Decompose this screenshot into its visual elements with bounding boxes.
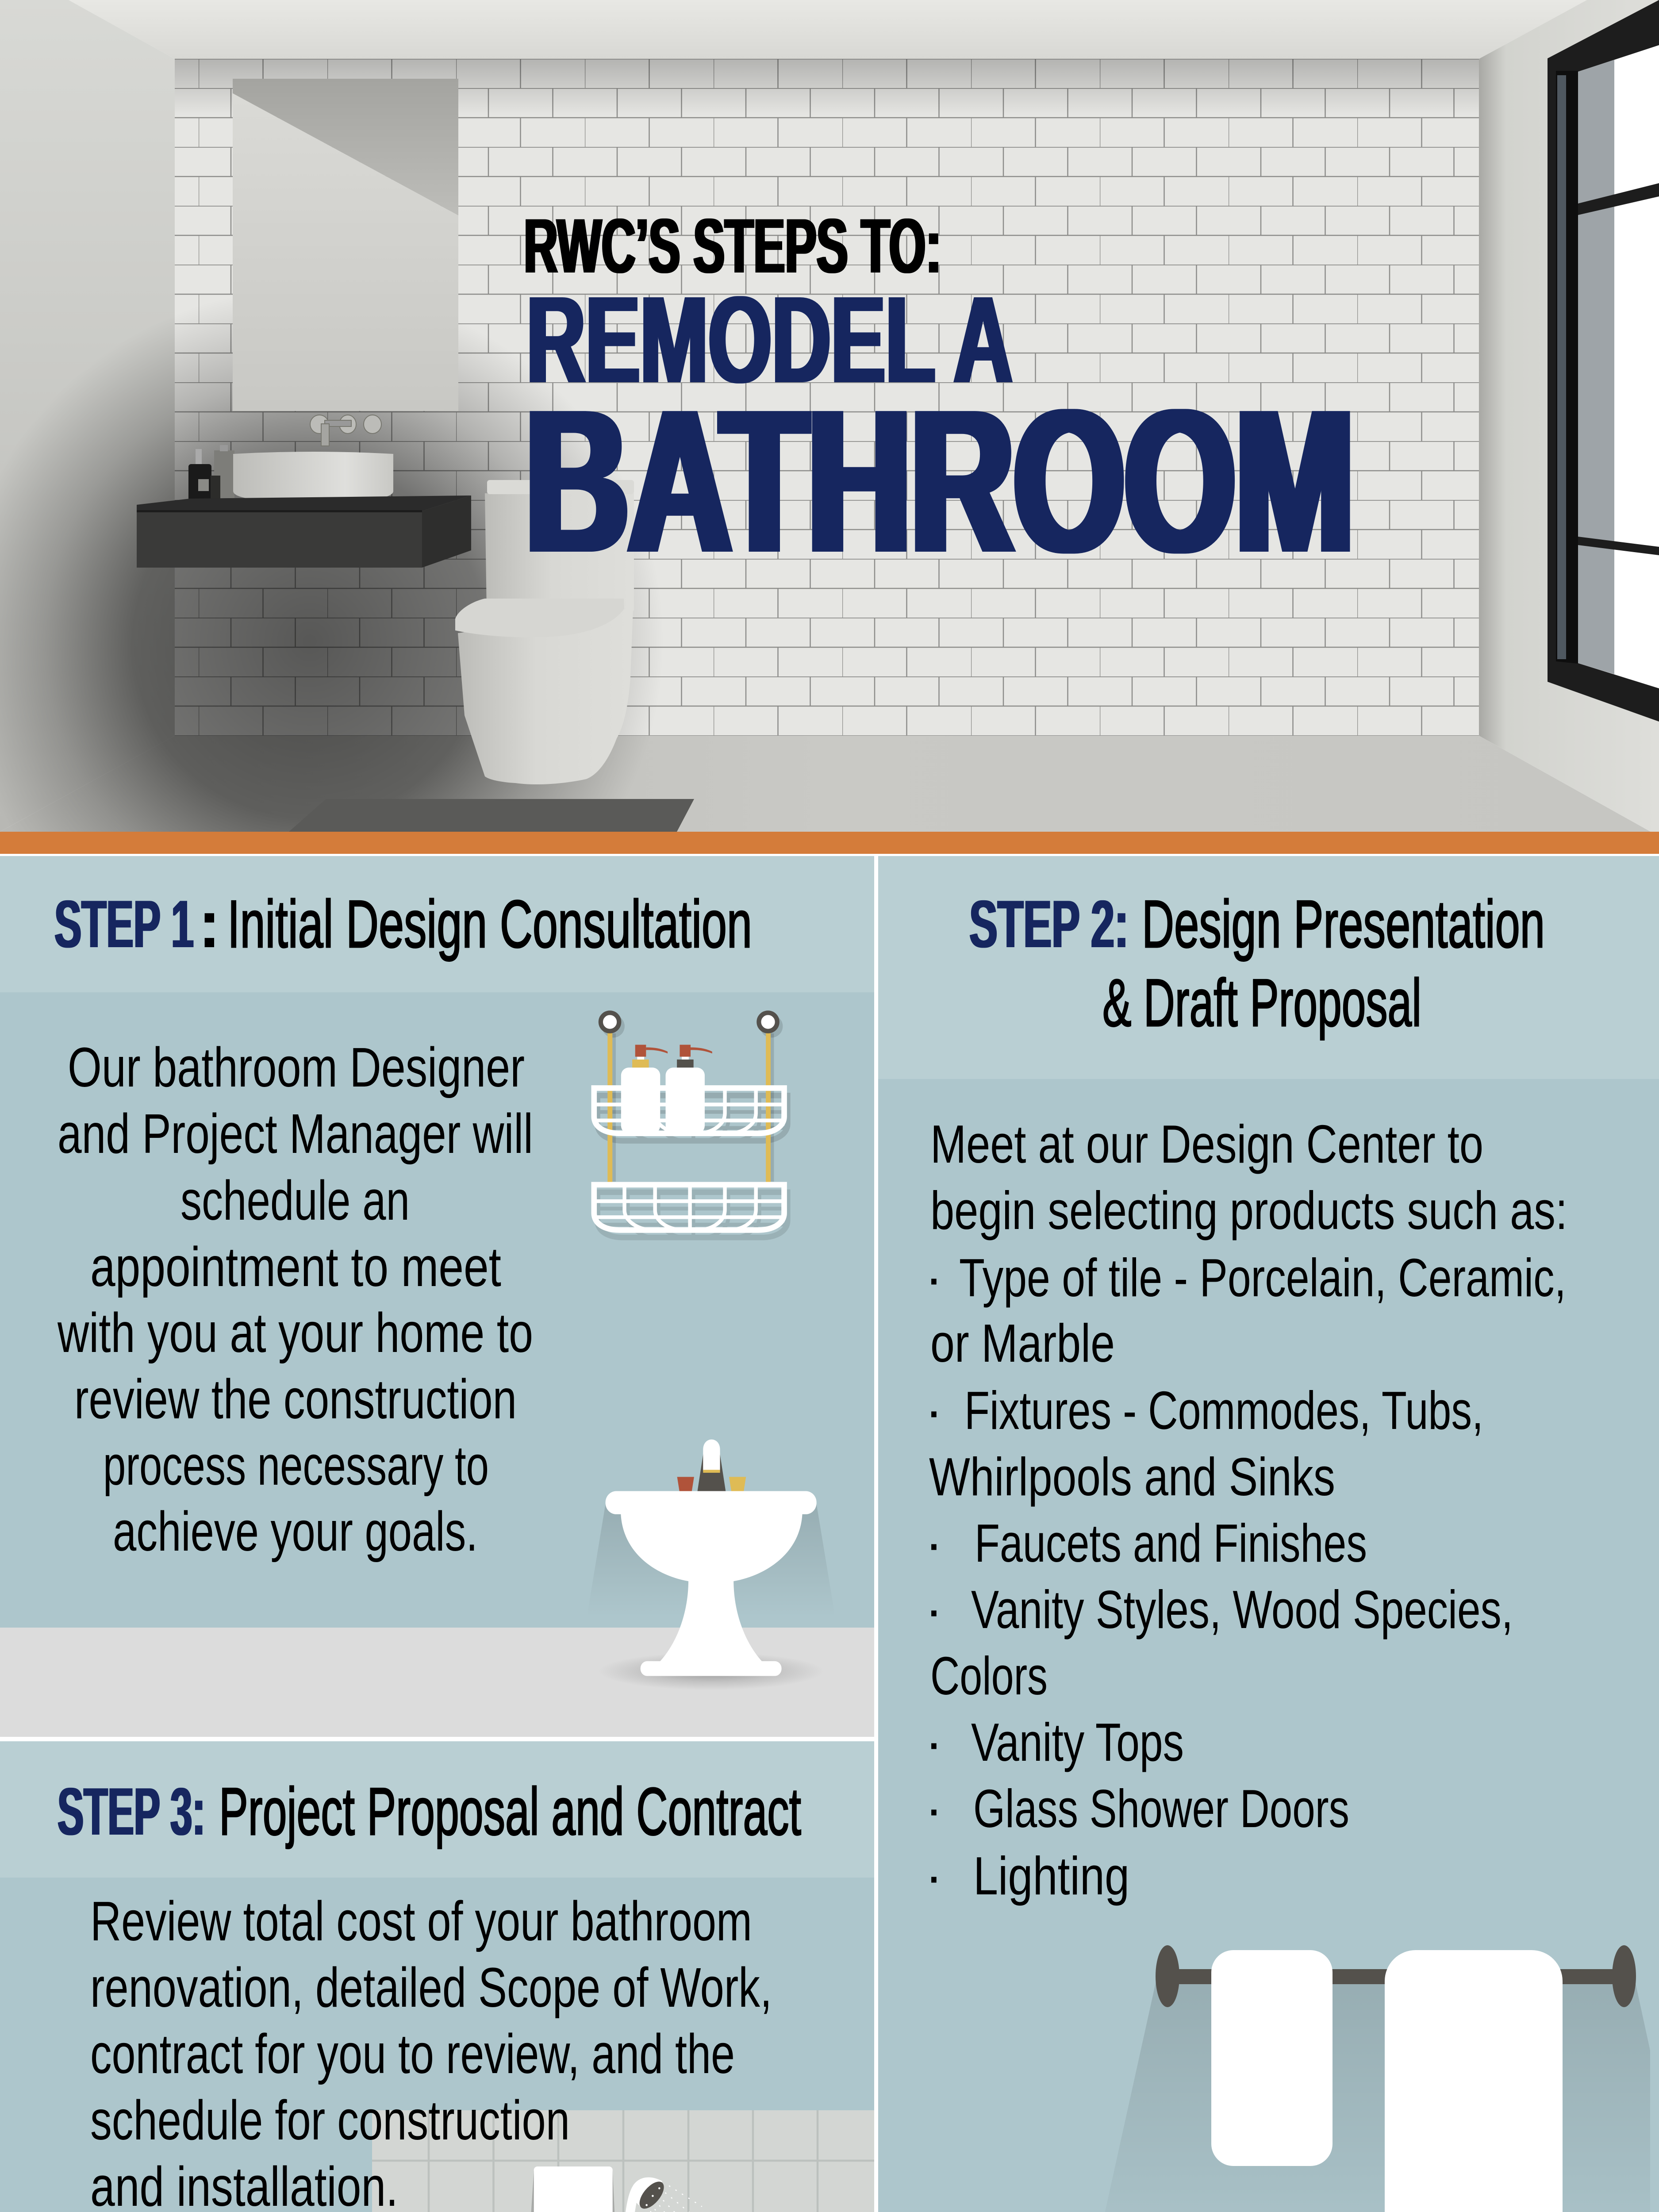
step 2 body text: · xyxy=(925,1380,943,1440)
left wall xyxy=(0,0,175,832)
step 1 heading: STEP 1 xyxy=(54,887,194,962)
step 2 heading xyxy=(969,887,1545,1041)
step 1 body text: with you at your home to xyxy=(57,1302,533,1364)
window xyxy=(1548,0,1659,722)
step 2 body text: · xyxy=(925,1778,943,1839)
step 1 body text: and Project Manager will xyxy=(58,1102,533,1165)
title xyxy=(524,203,1354,595)
step 2 header band xyxy=(878,856,1659,1079)
step 2 body text: Lighting xyxy=(973,1846,1129,1906)
step 1 body text: process necessary to xyxy=(103,1434,489,1497)
step 3 body text: Review total cost of your bathroom xyxy=(90,1890,752,1952)
step 1 body text: Our bathroom Designer xyxy=(68,1036,525,1098)
toilet xyxy=(455,480,634,784)
step 2 body text: · xyxy=(925,1248,943,1308)
mirror xyxy=(233,79,458,411)
step 3 header band xyxy=(0,1741,874,1878)
step 2 body text: · xyxy=(925,1513,943,1573)
step 2 body text: · xyxy=(925,1579,943,1640)
step 3 heading: Project Proposal and Contract xyxy=(219,1774,801,1849)
rug xyxy=(289,799,694,832)
step 3 body text xyxy=(90,1890,772,2212)
step 2 body text: or Marble xyxy=(930,1313,1115,1373)
step 2 body text: Colors xyxy=(930,1646,1048,1706)
step 3 body text: schedule for construction xyxy=(90,2089,570,2151)
icon: towel rack xyxy=(1090,1945,1650,2212)
room shadow xyxy=(0,59,708,832)
step 1 floor xyxy=(0,1628,874,1737)
icon: water heater and hand shower xyxy=(518,2166,707,2212)
panel: step 3 xyxy=(0,1741,874,2212)
vanity cabinet xyxy=(137,495,471,568)
icon: wire shelf with pump bottles xyxy=(594,1013,787,1237)
title line 1: RWC’S STEPS TO: xyxy=(524,203,941,289)
step 2 heading: & Draft Proposal xyxy=(1102,965,1421,1041)
step 2 body text: Fixtures - Commodes, Tubs, xyxy=(964,1380,1483,1440)
step 2 body text: · xyxy=(925,1712,943,1772)
top orange band xyxy=(0,832,1659,854)
ceiling xyxy=(69,0,1587,59)
step 2 body text: Whirlpools and Sinks xyxy=(929,1447,1335,1507)
panel: step 1 xyxy=(0,856,874,1737)
step 2 heading: STEP 2: xyxy=(969,887,1129,962)
basin xyxy=(233,452,393,502)
wall faucet xyxy=(310,415,381,446)
step 2 body text: Vanity Styles, Wood Species, xyxy=(971,1579,1513,1640)
hero bathroom scene xyxy=(0,0,1659,832)
step 2 body text: Faucets and Finishes xyxy=(975,1513,1367,1573)
step 1 body text: review the construction xyxy=(74,1368,517,1430)
step 1 body text: appointment to meet xyxy=(90,1236,501,1298)
step 1 body text: schedule an xyxy=(180,1169,410,1232)
step 2 body text: Vanity Tops xyxy=(971,1712,1184,1772)
step 1 body text: achieve your goals. xyxy=(113,1500,478,1563)
step 1 header band xyxy=(0,856,874,992)
step 3 body text: renovation, detailed Scope of Work, xyxy=(90,1956,772,2019)
soap bottles xyxy=(188,445,234,501)
right wall xyxy=(1479,0,1659,832)
step 2 body text xyxy=(925,1114,1567,1906)
title line 2: REMODEL A xyxy=(526,271,1013,409)
step 3 heading: STEP 3: xyxy=(58,1774,205,1849)
step 3 heading xyxy=(58,1774,801,1849)
step 2 body text: · xyxy=(925,1846,943,1906)
step 1 heading: : xyxy=(198,887,221,962)
step 1 body text xyxy=(57,1036,533,1563)
step 1 heading xyxy=(54,887,752,962)
step 3 body text: contract for you to review, and the xyxy=(90,2023,735,2085)
step 2 body text: Meet at our Design Center to xyxy=(930,1114,1483,1174)
icon: pedestal sink xyxy=(587,1440,835,1690)
step 1 heading: Initial Design Consultation xyxy=(227,887,752,962)
panel: step 2 xyxy=(878,856,1659,2212)
floor xyxy=(0,736,1651,832)
step 2 body text: Glass Shower Doors xyxy=(973,1778,1349,1839)
back wall tiles xyxy=(175,59,1479,736)
tiled wall xyxy=(372,2110,874,2212)
